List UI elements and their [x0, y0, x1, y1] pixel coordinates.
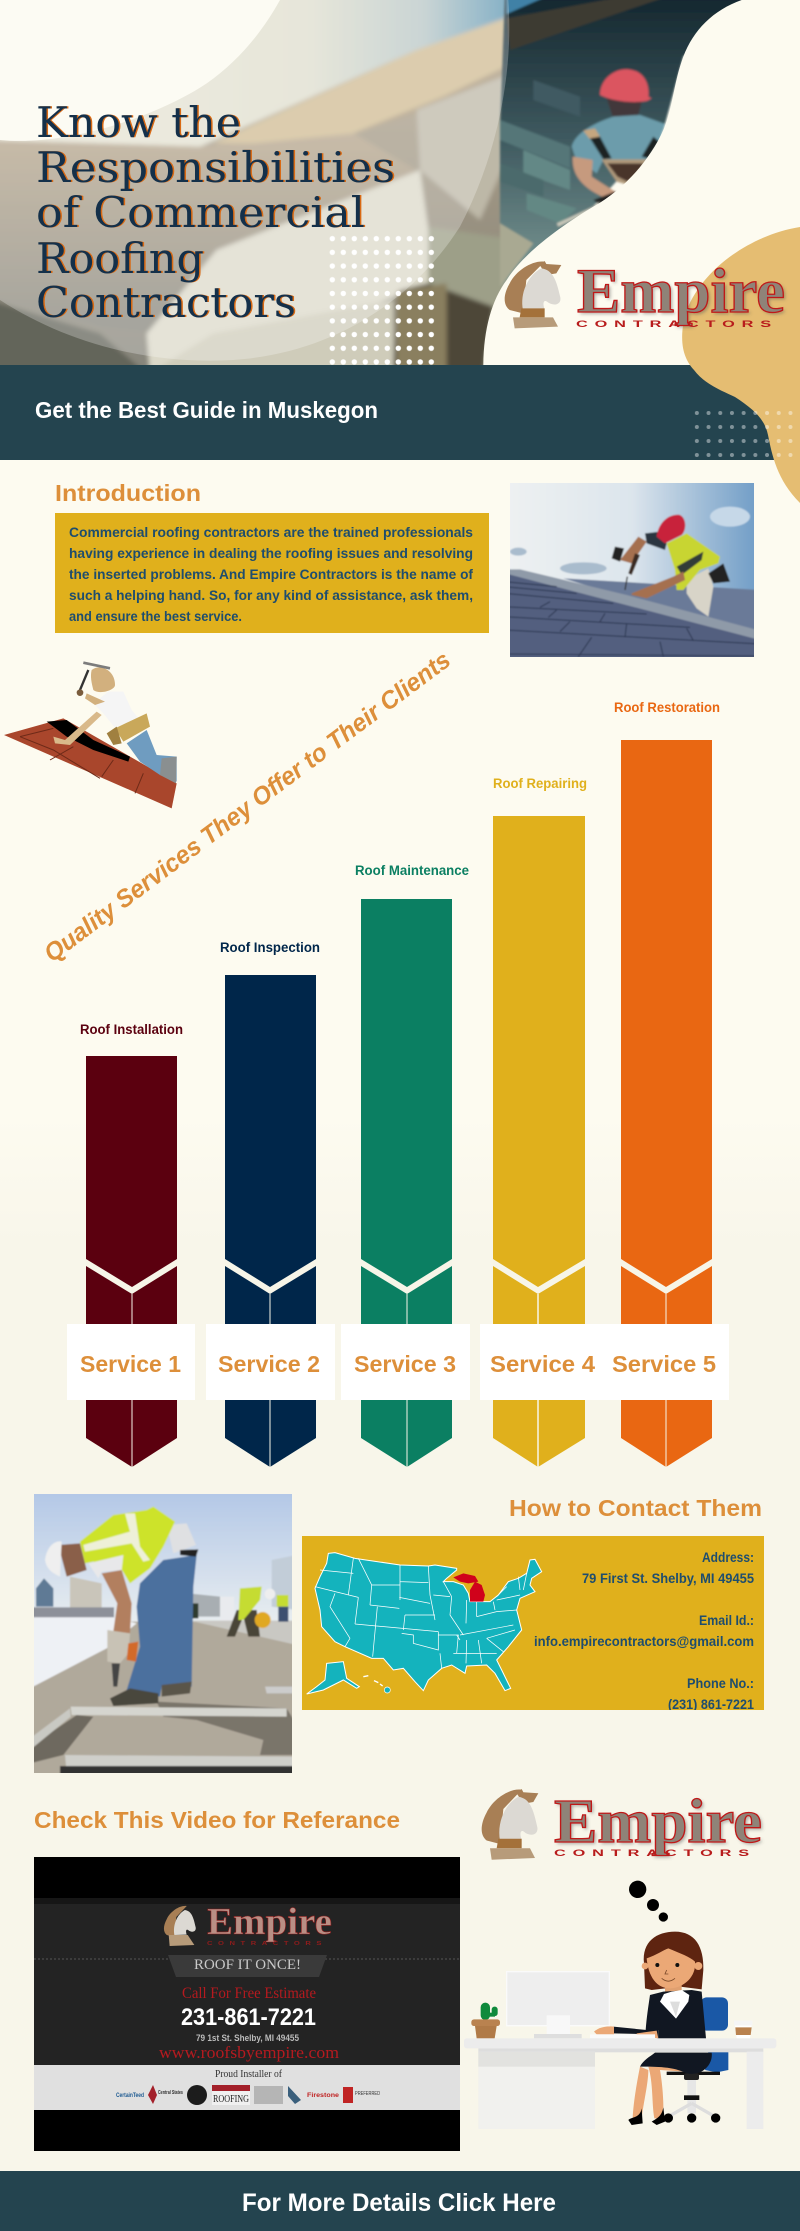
logo: Empire Contractors large: Empire	[554, 1788, 762, 1856]
contact text: info.empirecontractors@gmail.com	[534, 1633, 754, 1649]
logo: Empire Contractors: CONTRACTORS	[576, 319, 778, 330]
installer brand logos	[116, 2085, 380, 2105]
Alaska and Hawaii	[307, 1662, 359, 1694]
photo: roofer with drill on slate roof	[505, 478, 760, 662]
intro text: and ensure the best service.	[69, 608, 242, 624]
installer brand logos: Firestone	[307, 2093, 340, 2099]
hero photo: building under construction	[0, 0, 520, 380]
contact text: Address:	[702, 1549, 754, 1565]
service labels	[80, 1351, 716, 1377]
video thumbnail: ROOF IT ONCE!	[194, 1957, 301, 1973]
icon: horse head	[482, 1789, 538, 1860]
intro text: having experience in dealing the roofing issues and resolving	[69, 545, 473, 561]
contact text: Email Id.:	[699, 1612, 754, 1628]
hero title: Roofing	[36, 234, 204, 283]
footer band	[0, 2171, 800, 2231]
hard hat	[600, 69, 652, 102]
logo: Empire Contractors large	[482, 1788, 764, 1860]
video thumbnail: CONTRACTORS	[207, 1941, 327, 1947]
installer brand logos: ROOFING	[213, 2094, 249, 2105]
hero title: Roofing	[38, 234, 206, 283]
cream curved shape	[483, 0, 748, 365]
contact text: Phone No.:	[687, 1675, 754, 1691]
service labels: Service 3	[354, 1351, 456, 1377]
installer brand logos: Central States	[158, 2090, 183, 2096]
ribbon: service 1	[80, 1022, 183, 1467]
ribbon: service 4: Roof Repairing	[493, 776, 587, 791]
hero title: of Commercial	[38, 188, 366, 237]
logo: Empire Contractors large: CONTRACTORS	[554, 1848, 756, 1859]
video thumbnail: Proud Installer of	[215, 2069, 282, 2080]
monitor	[507, 1972, 655, 2038]
intro text: Commercial roofing contractors are the trained professionals	[69, 524, 473, 540]
photo: workers fastening roof boards	[30, 1490, 297, 1780]
ribbon: service 1: Roof Installation	[80, 1022, 183, 1037]
video thumbnail: 231-861-7221	[181, 2004, 316, 2031]
white dot grid	[327, 232, 437, 369]
logo: Empire Contractors: Empire	[579, 258, 787, 328]
service labels: Service 2	[218, 1351, 320, 1377]
panel: introduction	[55, 480, 489, 633]
video thumbnail: Call For Free Estimate	[182, 1985, 316, 2002]
icon: horse head	[505, 261, 561, 328]
cactus plant	[471, 2003, 500, 2038]
ribbon: service 2: Roof Inspection	[220, 940, 320, 955]
panel: contact details	[302, 1536, 764, 1712]
tan blob	[682, 227, 800, 503]
logo: Empire Contractors	[505, 256, 787, 330]
chart: service ribbons	[67, 700, 729, 1467]
video thumbnail	[34, 1857, 460, 2151]
woman	[594, 1932, 712, 2125]
heading: introduction: Introduction	[55, 480, 201, 506]
service labels: Service 5	[612, 1351, 716, 1377]
dark wall and worker in hard hat	[500, 0, 753, 287]
white label boxes	[67, 1324, 729, 1400]
hero title: Contractors	[38, 278, 298, 327]
intro box	[55, 513, 489, 633]
logo: Empire Contractors large: Empire	[556, 1790, 764, 1858]
subtitle band	[0, 365, 800, 460]
chair	[664, 1997, 728, 2123]
ribbon: service 5: Roof Restoration	[614, 700, 720, 715]
intro text: such a helping hand. So, for any kind of assistance, ask them,	[69, 587, 473, 603]
contact text: (231) 861-7221	[668, 1696, 754, 1712]
desk top	[464, 2038, 776, 2048]
map: United States with Michigan highlighted	[307, 1553, 542, 1694]
illustration: woman at desk thinking	[464, 1881, 776, 2129]
installer brand logos: CertainTeed	[116, 2093, 144, 2099]
subtitle: Get the Best Guide in Muskegon	[35, 397, 378, 423]
banner: roof it once	[168, 1955, 327, 1977]
hero banner	[0, 0, 742, 365]
background workers	[227, 1610, 260, 1637]
video thumbnail: www.roofsbyempire.com	[159, 2043, 339, 2062]
ribbon: service 3	[355, 863, 469, 1467]
hero title: Responsibilities	[36, 143, 395, 192]
Michigan	[453, 1573, 478, 1583]
white sky swoosh	[0, 0, 280, 141]
ribbon: service 4	[493, 776, 587, 1467]
heading: video: Check This Video for Referance	[34, 1807, 400, 1833]
coffee cup	[734, 2021, 752, 2038]
contact text: 79 First St. Shelby, MI 49455	[582, 1570, 754, 1586]
service labels: Service 4	[490, 1351, 595, 1377]
main worker	[127, 1555, 197, 1697]
icon: small horse head	[164, 1906, 196, 1946]
hero title: Know the	[36, 98, 241, 147]
hero title	[36, 98, 396, 327]
hero title: of Commercial	[36, 188, 365, 237]
intro text: the inserted problems. And Empire Contractors is the name of	[69, 566, 473, 582]
ribbon: service 3: Roof Maintenance	[355, 863, 469, 878]
installer brand logos: PREFERRED	[355, 2091, 380, 2097]
thought dots	[629, 1881, 668, 1922]
service labels: Service 1	[80, 1351, 181, 1377]
hero title: Contractors	[36, 278, 296, 327]
ribbon: service 2	[220, 940, 320, 1467]
translucent swoosh overlay	[0, 0, 509, 361]
heading: quality services: Quality Services They Offer to Their Clients	[39, 646, 456, 968]
heading: how to contact them: How to Contact Them	[509, 1495, 762, 1521]
worker	[687, 568, 713, 617]
intro text	[69, 524, 473, 624]
worker	[607, 98, 642, 116]
ribbon: service 5	[614, 700, 720, 1467]
hero title: Responsibilities	[38, 143, 396, 192]
footer call to action: For More Details Click Here	[242, 2189, 556, 2217]
video thumbnail: Empire	[207, 1901, 332, 1943]
hero title: Know the	[38, 98, 243, 147]
teal dot grid	[691, 406, 800, 462]
logo: Empire Contractors: Empire	[577, 256, 785, 326]
illustration: cartoon roofer on tiles	[4, 663, 177, 808]
contact text	[534, 1549, 754, 1712]
desk	[478, 2048, 763, 2129]
video thumbnail: 79 1st St. Shelby, MI 49455	[196, 2033, 299, 2043]
